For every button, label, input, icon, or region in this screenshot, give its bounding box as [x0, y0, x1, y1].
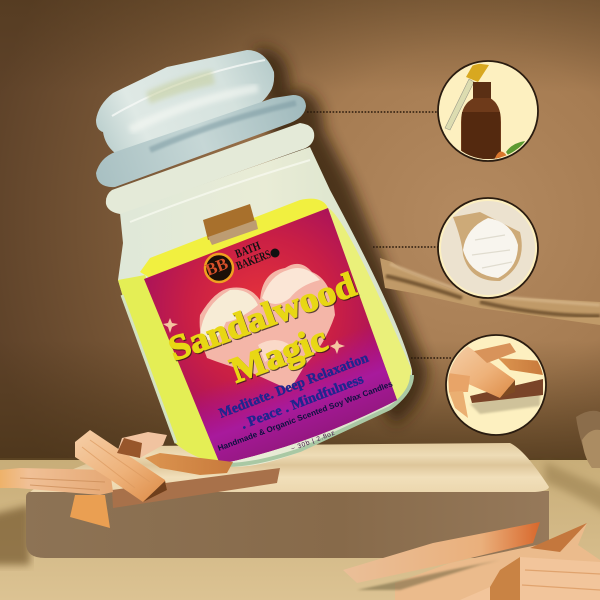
lid knob — [96, 50, 274, 153]
tagline: Handmade & Organic Scented Soy Wax Candles — [217, 379, 394, 453]
wooden board — [26, 443, 549, 558]
almond and leaf — [495, 141, 525, 160]
lid flange — [96, 95, 306, 187]
jar body — [118, 147, 412, 467]
benefits text: . Peace . Mindfulness — [239, 372, 366, 433]
title text: Sandalwood — [164, 266, 362, 370]
sandalwood chips left — [0, 430, 280, 528]
ingredient circle: soy wax flakes — [438, 198, 538, 298]
cloud heart — [200, 264, 335, 390]
flakes — [463, 218, 518, 278]
oil bottle — [461, 82, 501, 160]
jar neck rim — [106, 123, 314, 214]
wood stump right — [576, 411, 600, 468]
product label — [144, 208, 397, 464]
dotted connector lines — [307, 112, 452, 358]
sparkles — [163, 318, 345, 354]
brand logo — [203, 238, 280, 282]
wooden branch — [380, 258, 600, 325]
label background — [144, 208, 397, 464]
brand logo: BATH — [233, 238, 263, 261]
brand logo: BB — [203, 254, 231, 280]
glass bottom edge — [212, 375, 412, 465]
title text: Sandalwood — [163, 265, 361, 369]
table surface — [0, 458, 600, 600]
dropper — [445, 63, 489, 130]
ingredient circle: essential oil — [438, 61, 538, 161]
title text: Magic — [226, 319, 333, 391]
background wall — [0, 0, 600, 460]
wooden spoon — [453, 212, 522, 281]
top chip — [117, 432, 167, 458]
brand logo: BAKERS — [234, 247, 273, 273]
weight: ~ 30b | 2.8oz — [290, 430, 336, 453]
upper right stick — [145, 453, 233, 475]
long left stick — [0, 468, 113, 495]
jar shadow — [255, 48, 428, 425]
sandalwood chips right — [343, 522, 600, 600]
title text: Magic — [225, 318, 332, 390]
benefits text: Meditate. Deep Relaxation — [217, 351, 371, 422]
middle plank — [75, 430, 167, 502]
wick — [203, 204, 258, 245]
candle jar — [96, 50, 412, 467]
broken stick behind — [112, 468, 280, 508]
ingredient circle: sandalwood — [446, 335, 546, 435]
yellow wax — [118, 199, 411, 462]
